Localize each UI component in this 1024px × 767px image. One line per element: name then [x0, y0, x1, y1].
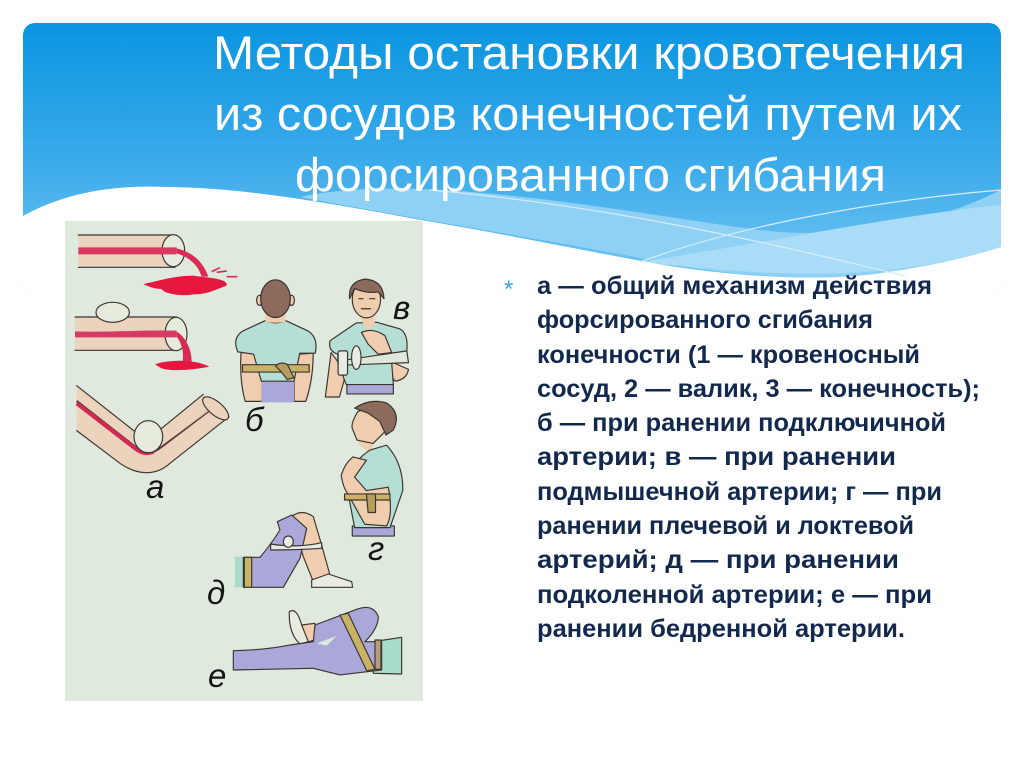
description text: сосуд, 2 — валик, 3 — конечность);	[537, 375, 980, 403]
description text: подколенной артерии; е — при	[537, 581, 932, 609]
label a: а	[146, 468, 164, 505]
description text: конечности (1 — кровеносный	[537, 341, 920, 369]
title: из сосудов конечностей путем их	[214, 87, 962, 140]
figure д: bent knee	[235, 512, 353, 587]
label б: б	[245, 401, 265, 438]
label е: е	[208, 657, 226, 694]
header banner with wave	[23, 23, 1001, 293]
title: форсированного сгибания	[295, 148, 886, 201]
title: Методы остановки кровотечения	[213, 26, 965, 79]
illustration panel	[65, 221, 423, 701]
description text: ранении бедренной артерии.	[537, 615, 905, 643]
figure е: lying leg	[233, 607, 402, 675]
description text: форсированного сгибания	[537, 306, 873, 334]
label в: в	[393, 289, 410, 326]
description text: артерии; в — при ранении	[537, 443, 896, 471]
label г: г	[368, 530, 384, 567]
description text: а — общий механизм действия	[537, 272, 932, 300]
bullet marker: *	[504, 276, 513, 303]
figure a: vessel diagrams	[75, 235, 237, 473]
figure г: side view man	[341, 401, 403, 536]
description text: б — при ранении подключичной	[537, 409, 946, 437]
figure в: front view man	[325, 279, 409, 397]
description text: подмышечной артерии; г — при	[537, 478, 942, 506]
figure б: back view man	[236, 280, 316, 402]
label д: д	[207, 574, 225, 611]
description text	[537, 272, 980, 643]
description text: ранении плечевой и локтевой	[537, 512, 914, 540]
description text: артерий; д — при ранении	[537, 546, 899, 574]
title	[213, 26, 965, 201]
